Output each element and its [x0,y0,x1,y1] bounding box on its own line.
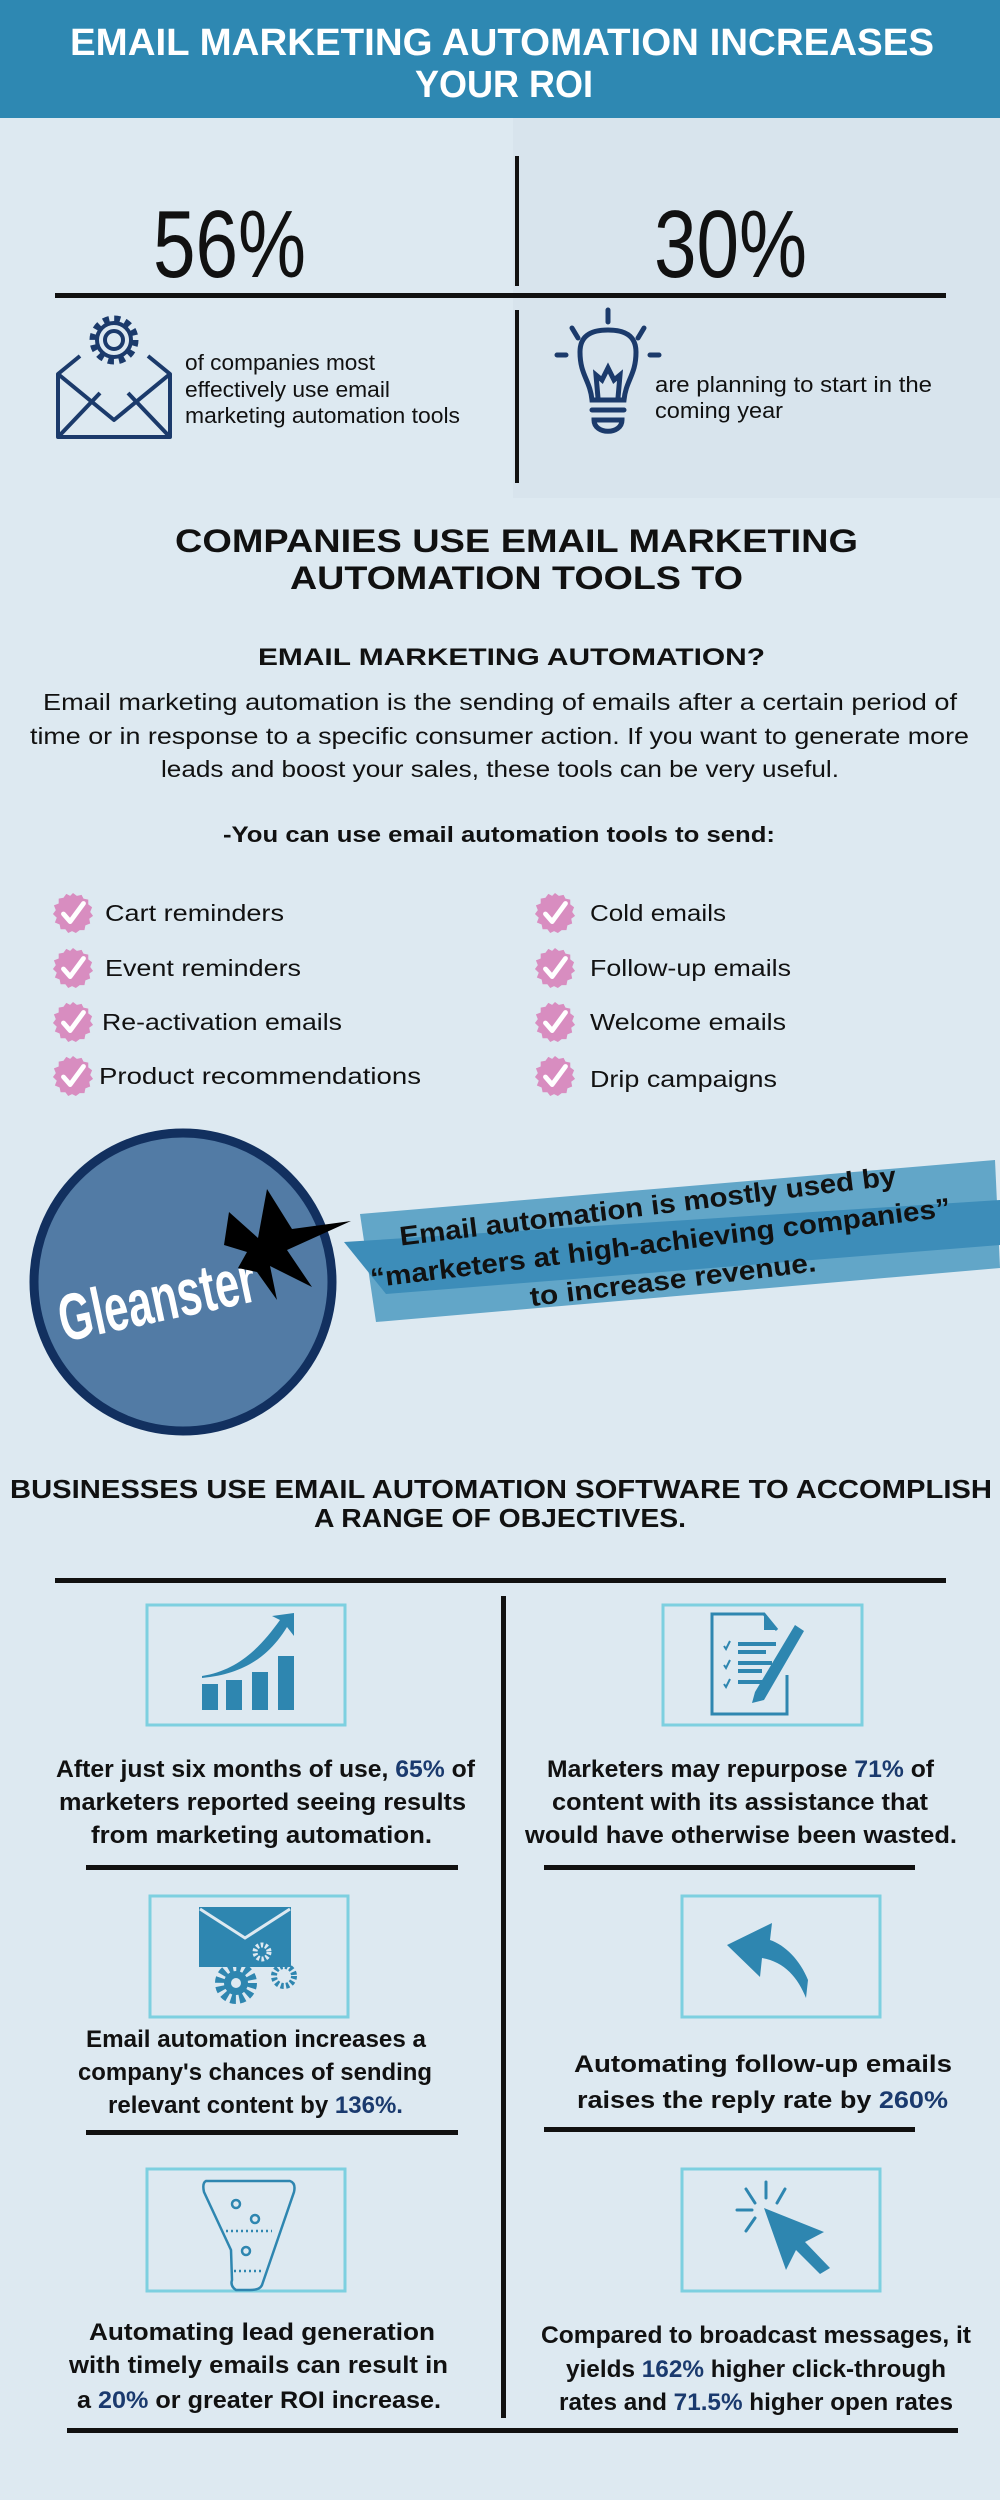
text [68,2319,448,2414]
heading: businesses use: BUSINESSES USE EMAIL AUTOMATION SOFTWARE TO ACCOMPLISH [10,1474,992,1504]
icon: light bulb [557,310,659,431]
text: Automating lead generation [89,2319,435,2346]
card: 71% repurpose [524,1605,957,1849]
title: EMAIL MARKETING AUTOMATION INCREASES [70,22,934,64]
text: Marketers may repurpose 71% of [547,1756,935,1783]
heading: businesses use: A RANGE OF OBJECTIVES. [314,1503,686,1533]
circle: Gleanster [34,1133,332,1431]
objectives grid [55,1578,971,2433]
item: cold emails: Cold emails [590,900,726,926]
item: drip campaigns: Drip campaigns [590,1066,777,1092]
text: Automating follow-up emails [574,2051,952,2078]
text: relevant content by 136%. [108,2092,403,2119]
brush banner [344,1160,1000,1322]
text [78,2026,432,2119]
list intro: -You can use email automation tools to send: [223,822,775,847]
text: marketers reported seeing results [59,1789,466,1816]
text: 56% caption: effectively use email [185,377,390,402]
text: 56% caption [185,350,460,428]
card: 162% click-through [541,2169,971,2416]
text: rates and 71.5% higher open rates [559,2389,953,2416]
icon: growth chart [147,1605,345,1725]
item: event reminders: Event reminders [105,955,301,981]
text: 56% caption: marketing automation tools [185,403,460,428]
heading: companies use: COMPANIES USE EMAIL MARKETING [175,523,858,559]
text [56,1756,476,1849]
text [524,1756,957,1849]
icon: funnel [147,2169,345,2291]
quote text: to increase revenue. [528,1247,818,1312]
item: cold emails [535,893,726,933]
paragraph: definition: leads and boost your sales, these tools can be very useful. [161,756,839,782]
paragraph: definition: time or in response to a specific consumer action. If you want to generate more [30,723,969,749]
text: raises the reply rate by 260% [577,2087,948,2114]
stat: 30%: 30% [654,191,807,298]
text [574,2051,952,2114]
checklist [53,893,791,1096]
text: 30% caption: coming year [655,398,783,423]
item: product recommendations: Product recommendations [99,1063,421,1089]
text: Compared to broadcast messages, it [541,2322,971,2349]
item: welcome emails: Welcome emails [590,1009,786,1035]
text: 56% caption: of companies most [185,350,375,375]
text: After just six months of use, 65% of [56,1756,476,1783]
item: product recommendations [53,1056,421,1096]
item: drip campaigns [535,1056,777,1096]
subheading: email marketing automation: EMAIL MARKETING AUTOMATION? [258,644,765,671]
quote section [34,1133,1000,1431]
item: welcome emails [535,1002,786,1042]
circle: Gleanster: Gleanster [51,1242,262,1356]
text: content with its assistance that [552,1789,928,1816]
icon: reply arrow [682,1896,880,2017]
card: 136% relevant content [78,1896,432,2119]
text [541,2322,971,2416]
card: 65% results [56,1605,476,1849]
item: follow-up emails [535,948,791,988]
stats panel [55,156,946,483]
heading: companies use [175,523,858,596]
icon: mouse cursor [682,2169,880,2291]
title: YOUR ROI [415,64,593,106]
paragraph: definition [30,689,969,782]
icon: starburst [224,1189,351,1300]
stat: 56%: 56% [153,191,306,298]
quote text [364,1155,957,1331]
icon: envelope with gears [150,1896,348,2017]
heading: businesses use [10,1474,992,1533]
card: 260% reply rate [574,1896,952,2114]
text: 30% caption [655,372,932,423]
text: from marketing automation. [91,1822,432,1849]
text: company's chances of sending [78,2059,432,2086]
icon: checklist document with pen [663,1605,862,1725]
icon: envelope with gear [58,319,170,437]
text: a 20% or greater ROI increase. [77,2387,441,2414]
text: Email automation increases a [86,2026,427,2053]
item: cart reminders: Cart reminders [105,900,284,926]
item: re-activation emails: Re-activation emails [102,1009,342,1035]
item: event reminders [53,948,301,988]
text: would have otherwise been wasted. [524,1822,957,1849]
item: re-activation emails [53,1002,342,1042]
text: 30% caption: are planning to start in the [655,372,932,397]
heading: companies use: AUTOMATION TOOLS TO [290,560,743,596]
text: with timely emails can result in [68,2352,448,2379]
quote text: “marketers at high-achieving companies” [369,1193,952,1293]
header banner [0,0,1000,118]
quote text: Email automation is mostly used by [398,1161,898,1252]
title [70,22,934,106]
paragraph: definition: Email marketing automation is the sending of emails after a certain period of [43,689,958,715]
text: yields 162% higher click-through [566,2356,946,2383]
card: 20% ROI [68,2169,448,2414]
item: cart reminders [53,893,284,933]
item: follow-up emails: Follow-up emails [590,955,791,981]
